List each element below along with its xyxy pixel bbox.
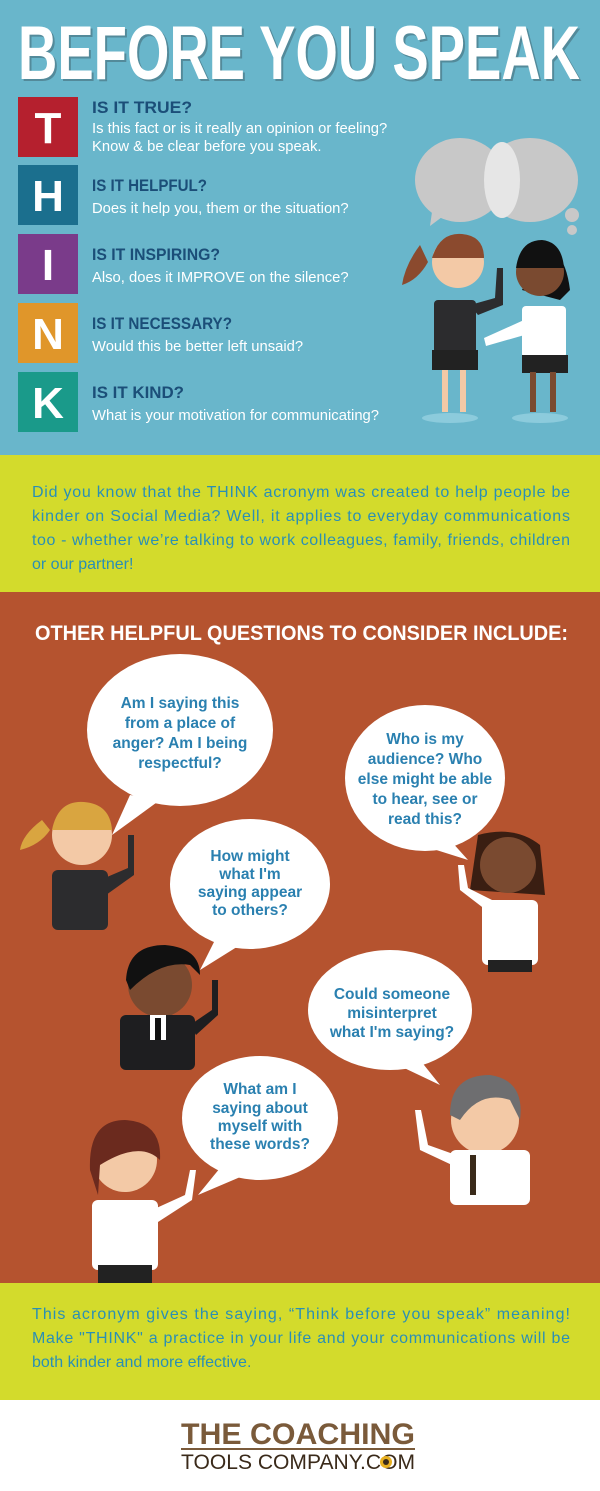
item K: What is your motivation for communicating?: [92, 408, 379, 424]
bubble 5: [182, 1056, 338, 1195]
item K: [18, 372, 379, 432]
bubble 4: what I'm saying?: [329, 1024, 454, 1041]
person: dark-skinned woman: [458, 832, 545, 972]
item K: IS IT KIND?: [92, 383, 184, 402]
bubble 3: saying appear: [198, 884, 302, 901]
bubble 1: Am I saying this: [121, 695, 239, 712]
item K: K: [32, 379, 64, 428]
bubble 5: these words?: [210, 1136, 310, 1153]
person: blonde woman: [20, 802, 134, 930]
item I: [18, 234, 349, 294]
bubble 1: from a place of: [125, 715, 236, 732]
item H: Does it help you, them or the situation?: [92, 201, 349, 217]
bubble 2: [345, 705, 505, 860]
intro paragraph: Did you know that the THINK acronym was created to help people be: [32, 484, 570, 501]
item T: T: [35, 104, 62, 153]
bubble 3: [170, 819, 330, 970]
item T: [18, 97, 387, 157]
person: brown-haired woman: [90, 1120, 196, 1283]
bubble 4: misinterpret: [347, 1005, 437, 1022]
item I: Also, does it IMPROVE on the silence?: [92, 270, 349, 286]
item N: N: [32, 310, 64, 359]
item N: Would this be better left unsaid?: [92, 339, 303, 355]
bubble 3: what I'm: [218, 866, 281, 883]
item N: IS IT NECESSARY?: [92, 314, 232, 333]
bubble 1: anger? Am I being: [113, 735, 247, 752]
person: grey-haired man: [415, 1075, 530, 1205]
bubble 5: saying about: [212, 1100, 308, 1117]
person: man in suit: [120, 945, 218, 1070]
item H: IS IT HELPFUL?: [92, 176, 207, 195]
closing paragraph: Make "THINK" a practice in your life and your communications will be: [32, 1330, 570, 1347]
bubble 2: else might be able: [358, 771, 493, 788]
bubble 2: read this?: [388, 811, 462, 828]
item N: [18, 303, 303, 363]
bubble 4: [308, 950, 472, 1085]
bubble 1: [87, 654, 273, 835]
bubble 5: What am I: [223, 1081, 297, 1098]
logo: TOOLS COMPANY.COM: [181, 1451, 415, 1474]
logo: [181, 1418, 415, 1474]
closing paragraph: both kinder and more effective.: [32, 1354, 251, 1371]
bubble 4: Could someone: [334, 986, 451, 1003]
intro paragraph: too - whether we’re talking to work colleagues, family, friends, children: [32, 532, 570, 549]
item T: Is this fact or is it really an opinion or feeling?: [92, 121, 387, 137]
intro paragraph: or our partner!: [32, 556, 133, 573]
bubble 2: Who is my: [386, 731, 464, 748]
bubble 1: respectful?: [138, 755, 222, 772]
item T: IS IT TRUE?: [92, 98, 192, 117]
illustration: thought bubbles: [415, 138, 579, 235]
bubble 3: to others?: [212, 902, 288, 919]
item T: Know & be clear before you speak.: [92, 139, 322, 155]
section heading: OTHER HELPFUL QUESTIONS TO CONSIDER INCLUDE:: [35, 622, 568, 645]
bubble 2: to hear, see or: [372, 791, 478, 808]
bubble 2: audience? Who: [368, 751, 482, 768]
intro paragraph: kinder on Social Media? Well, it applies to everyday communications: [32, 508, 570, 525]
intro paragraph: [32, 484, 570, 573]
logo: THE COACHING: [181, 1418, 415, 1451]
item H: [18, 165, 349, 225]
closing paragraph: [32, 1306, 570, 1371]
item I: I: [42, 241, 54, 290]
bubble 3: How might: [210, 848, 290, 865]
bubble 5: myself with: [218, 1118, 302, 1135]
item H: H: [32, 172, 64, 221]
closing paragraph: This acronym gives the saying, “Think before you speak” meaning!: [32, 1306, 570, 1323]
illustration: two women shaking hands: [402, 234, 570, 423]
item I: IS IT INSPIRING?: [92, 245, 220, 264]
